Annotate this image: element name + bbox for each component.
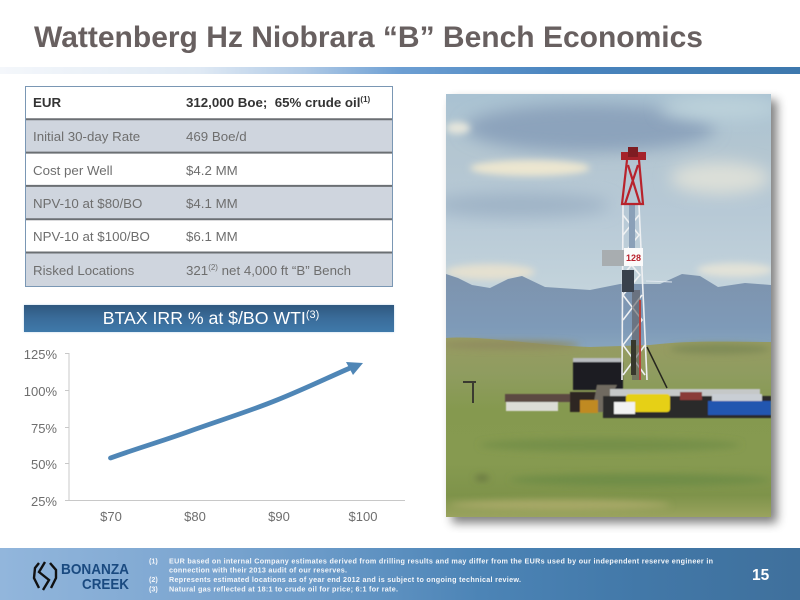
row: cost per well: [25, 153, 393, 186]
logo wordmark: CREEK: [82, 576, 129, 593]
footnote 1: [149, 556, 713, 574]
footnote 3: Natural gas reflected at 18:1 to crude oil for price; 6:1 for rate.: [169, 584, 398, 594]
row: EUR: [25, 86, 393, 119]
logo wordmark: [61, 561, 129, 593]
row: NPV-10 at $100: [25, 219, 393, 252]
footnote 1: connection with their 2013 audit of our reserves.: [169, 566, 347, 574]
photo: drilling rig on grassland: [445, 93, 784, 530]
y axis: [24, 347, 69, 509]
rig number sign: [624, 248, 643, 266]
y axis: 25%: [31, 494, 57, 509]
x axis: $80: [184, 509, 206, 524]
line chart: IRR vs oil price: [24, 347, 405, 524]
row: NPV-10 at $80: $4.1 MM: [186, 196, 238, 211]
x axis: $90: [268, 509, 290, 524]
row: NPV-10 at $100: $6.1 MM: [186, 229, 238, 244]
row: NPV-10 at $80: NPV-10 at $80/BO: [33, 196, 142, 211]
y axis: 50%: [31, 457, 57, 472]
x axis: $100: [349, 509, 377, 524]
row: EUR: 312,000 Boe; 65% crude oil(1): [186, 95, 370, 110]
y axis: 75%: [31, 421, 57, 436]
photo shadow: [452, 100, 777, 523]
footer band: [0, 548, 800, 600]
row: risked locations: Risked Locations: [33, 262, 134, 278]
row: initial rate: Initial 30-day Rate: [33, 129, 140, 144]
mountains: [446, 274, 771, 350]
row: NPV-10 at $80: [25, 186, 393, 219]
chart heading band: BTAX IRR % at $/BO WTI(3): [103, 308, 319, 328]
row: EUR: EUR: [33, 95, 61, 110]
rig site equipment: [505, 358, 771, 418]
x axis: [65, 500, 405, 524]
chart heading band: [24, 305, 394, 332]
x axis: $70: [100, 509, 122, 524]
row: NPV-10 at $100: NPV-10 at $100/BO: [33, 229, 150, 244]
panel: well economics table: [25, 86, 393, 287]
rig number sign: 128: [626, 253, 641, 263]
footnote 3: (3): [149, 584, 158, 594]
grass texture: [440, 341, 770, 510]
logo wordmark: BONANZA: [61, 561, 129, 578]
grassland: [446, 337, 771, 517]
derrick mast: [602, 147, 672, 388]
row: risked locations: 321(2) net 4,000 ft “B” Bench: [186, 262, 351, 278]
y axis: 125%: [24, 347, 57, 362]
row: initial rate: 469 Boe/d: [186, 129, 247, 144]
clouds: [430, 96, 780, 280]
row: risked locations: [25, 252, 393, 286]
footnote 1: (1): [149, 556, 158, 566]
footnotes: [149, 556, 713, 594]
row: cost per well: $4.2 MM: [186, 163, 238, 178]
footnote 2: Represents estimated locations as of year end 2012 and is subject to ongoing technical review.: [169, 575, 521, 584]
title: Wattenberg Hz Niobrara “B” Bench Economics: [34, 21, 703, 54]
header gradient rule: [0, 67, 800, 74]
row: initial rate: [25, 119, 393, 153]
derrick crown: [622, 160, 643, 204]
logo mark: [34, 562, 56, 590]
page number: 15: [752, 567, 769, 584]
arrow: IRR curve: [110, 362, 363, 458]
logo: Bonanza Creek: [32, 561, 129, 593]
row: cost per well: Cost per Well: [33, 163, 113, 178]
y axis: 100%: [24, 384, 57, 399]
footnote 1: EUR based on internal Company estimates derived from drilling results and may differ from the EURs used by our independent reserve engineer in: [169, 556, 713, 566]
sky: [446, 94, 771, 294]
pump jack: [463, 382, 476, 403]
footnote 2: (2): [149, 575, 158, 584]
